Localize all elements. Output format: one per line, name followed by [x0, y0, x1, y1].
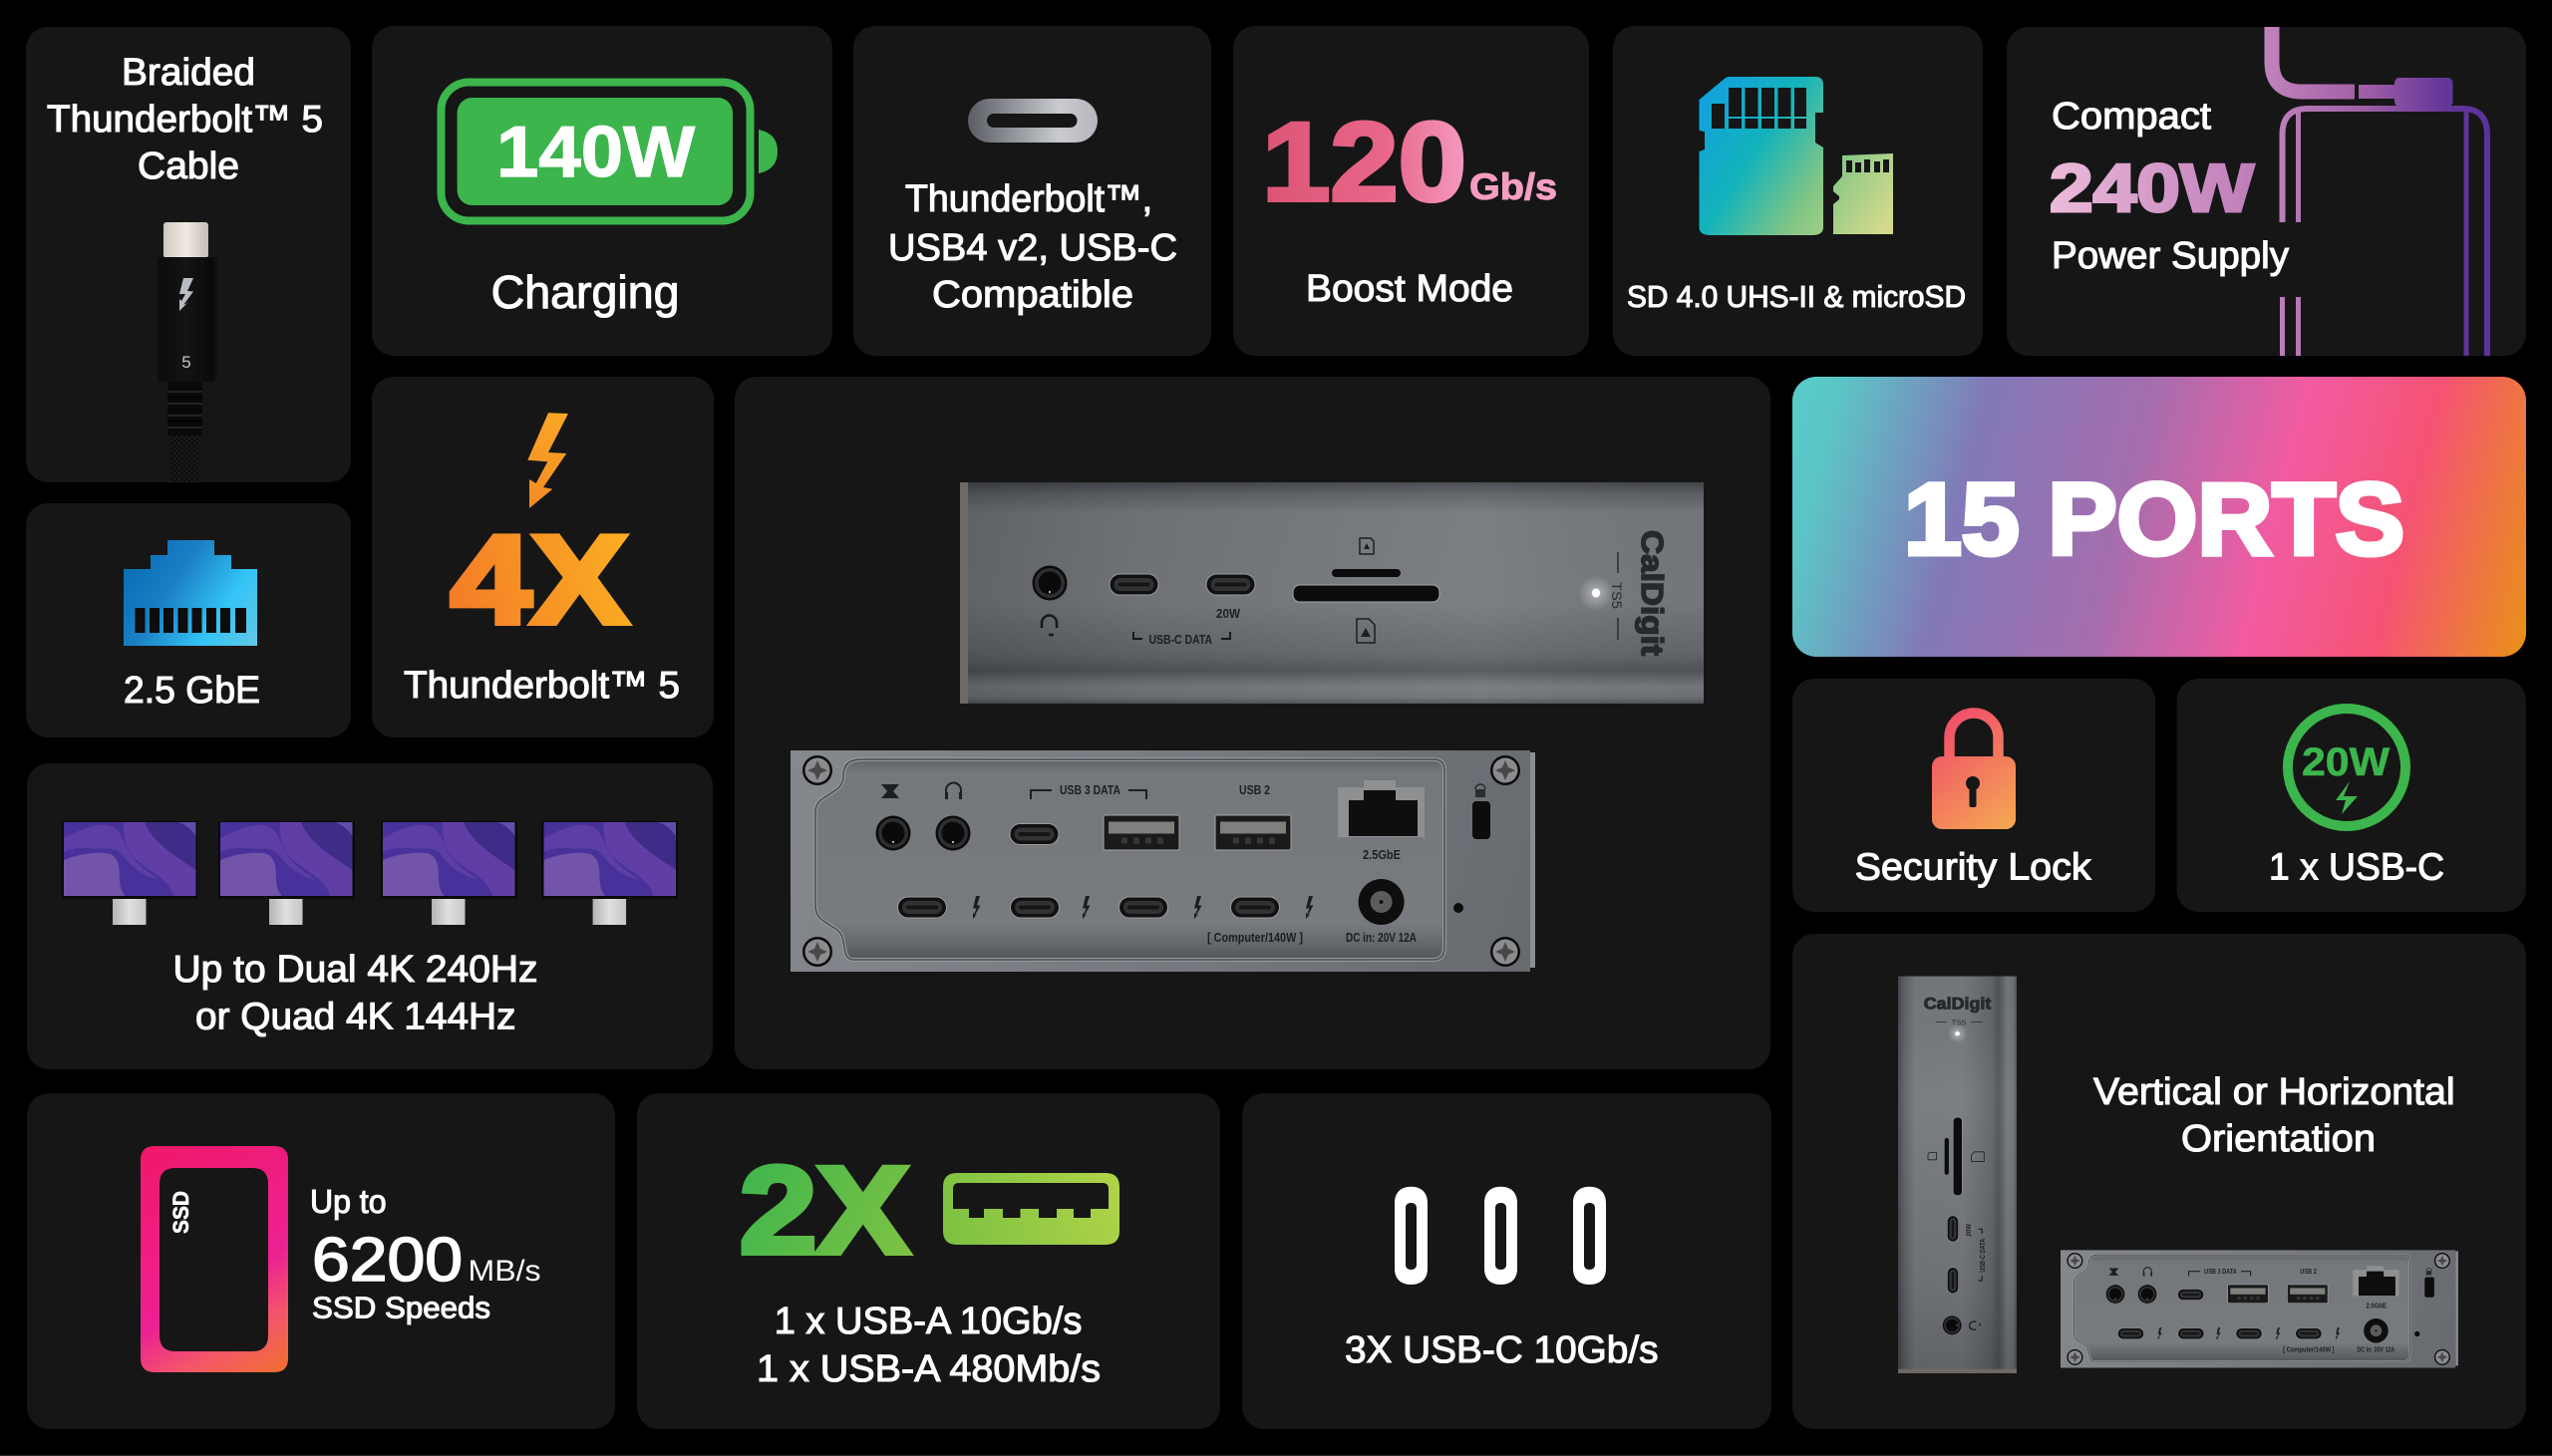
banner: 15 ports [1792, 377, 2526, 657]
illustration: dock vertical [1898, 977, 2017, 1373]
label: SSD speed: 6200 [312, 1226, 463, 1295]
panel: 2.5 GbE [26, 503, 351, 737]
panel: 4X Thunderbolt 5 [372, 377, 714, 737]
panel: 3X USB-C [1242, 1093, 1771, 1429]
illustration: dock front: 20W [1216, 606, 1241, 621]
icon: battery [441, 82, 778, 221]
label: SSD speed: MB/s [469, 1255, 540, 1288]
label: compatibility: USB4 v2, USB-C [888, 227, 1177, 269]
illustration: dock front: TS5 [1609, 582, 1625, 609]
panel: braided Thunderbolt 5 cable [26, 27, 351, 482]
illustration: dock back: 2.5GbE [1363, 847, 1401, 862]
icon: SSD drive: SSD [168, 1191, 193, 1234]
label: SSD speed: Up to [310, 1183, 387, 1220]
panel: display support [27, 763, 713, 1069]
label: 1 x USB-C: 1 x USB-C [2269, 847, 2444, 889]
panel: orientation [1792, 934, 2526, 1429]
figure: 120 Gb/s [1262, 100, 1557, 224]
illustration: dock back small: DC in: 20V 12A [2357, 1347, 2394, 1354]
illustration: dock vertical: 20W [1966, 1223, 1973, 1237]
panel: security lock [1792, 679, 2155, 912]
figure: 120 Gb/s: 120 [1262, 100, 1466, 224]
panel: compact 240W power supply [2007, 27, 2526, 356]
illustration: dock back small: USB 2 [2300, 1269, 2317, 1276]
panel: 2X USB-A [637, 1093, 1220, 1429]
illustration: dock back: USB 3 DATA [1060, 782, 1120, 797]
label: orientation: Vertical or Horizontal [2093, 1071, 2455, 1113]
heading: braided cable [47, 52, 323, 187]
illustration: dock back: DC in: 20V 12A [1346, 930, 1417, 945]
illustration: dock vertical: CalDigit [1924, 995, 1992, 1014]
label: USB-A speeds: 1 x USB-A 480Mb/s [757, 1348, 1101, 1390]
label: power supply: Power Supply [2052, 235, 2289, 277]
figure: 120 Gb/s: Gb/s [1469, 166, 1557, 207]
panel: SD and microSD [1613, 26, 1983, 356]
figure: 240W: 240W [2050, 150, 2255, 226]
label: boost mode: Boost Mode [1306, 268, 1513, 310]
label: display modes: Up to Dual 4K 240Hz [173, 949, 538, 991]
heading: braided cable: Thunderbolt™ 5 [47, 99, 323, 141]
label: orientation: Orientation [2181, 1118, 2376, 1160]
label: compatibility [888, 178, 1177, 316]
icon: padlock [1932, 714, 2016, 829]
heading: braided cable: Braided [122, 52, 255, 94]
icon: Thunderbolt cable connector: 5 [181, 353, 191, 372]
label: USB-A speeds [757, 1301, 1101, 1390]
illustration: dock front [960, 482, 1704, 704]
label: compatibility: Compatible [932, 274, 1133, 316]
illustration: dock vertical: USB-C DATA [1980, 1239, 1987, 1273]
illustration: dock back: USB 2 [1239, 782, 1270, 797]
icon: 20W charging ring: 20W [2302, 740, 2390, 784]
illustration: dock back small: 2.5GbE [2367, 1303, 2387, 1310]
icon: USB-A port [943, 1173, 1119, 1245]
label: 2.5 GbE: 2.5 GbE [124, 670, 260, 712]
illustration: dock front: USB-C DATA [1148, 632, 1212, 647]
figure: 2X: 2X [740, 1142, 909, 1280]
icon: 20W charging ring [2288, 709, 2405, 826]
illustration: power supply and cable [2272, 27, 2487, 356]
panel: 120 Gb/s boost mode [1233, 26, 1589, 356]
illustration: dock back small: [ Computer/140W ] [2283, 1347, 2334, 1354]
icon: orange lightning bolt [527, 413, 568, 508]
label: Thunderbolt 5: Thunderbolt™ 5 [404, 665, 680, 707]
icon: battery: 140W [496, 113, 695, 192]
label: SSD speed [310, 1183, 540, 1325]
figure: 4X: 4X [451, 509, 628, 650]
panel: SSD speeds [27, 1093, 615, 1429]
label: compact: Compact [2052, 96, 2211, 138]
label: charging: Charging [491, 266, 680, 318]
panel: dock front and back [735, 377, 1770, 1069]
panel: Thunderbolt USB4 compatibility [853, 26, 1211, 356]
banner: 15 ports: 15 PORTS [1904, 462, 2404, 576]
heading: braided cable: Cable [138, 146, 239, 187]
label: 3X USB-C: 3X USB-C 10Gb/s [1345, 1329, 1659, 1371]
icon: three USB-C ports [1395, 1187, 1606, 1285]
label: USB-A speeds: 1 x USB-A 10Gb/s [775, 1301, 1082, 1342]
illustration: dock back: [ Computer/140W ] [1207, 930, 1303, 945]
label: orientation [2093, 1071, 2455, 1160]
illustration: dock vertical: TS5 [1952, 1019, 1966, 1027]
panel: 20W USB-C [2177, 679, 2526, 912]
illustration: dock front: CalDigit [1635, 530, 1670, 656]
label: display modes: or Quad 4K 144Hz [195, 997, 516, 1038]
icon: four monitors [62, 821, 678, 925]
icon: ethernet port [124, 540, 257, 646]
icon: Thunderbolt cable connector [154, 222, 218, 482]
icon: SSD drive [141, 1146, 288, 1372]
label: SD cards: SD 4.0 UHS-II & microSD [1627, 279, 1966, 314]
illustration: dock back small [2061, 1250, 2458, 1368]
label: compatibility: Thunderbolt™, [905, 178, 1152, 220]
label: security lock: Security Lock [1855, 847, 2092, 889]
icon: USB-C port [968, 99, 1098, 143]
icon: SD cards [1699, 77, 1893, 235]
panel: 140W charging [372, 26, 832, 356]
label: SSD speed: SSD Speeds [312, 1291, 490, 1325]
label: display modes [173, 949, 538, 1038]
illustration: dock back small: USB 3 DATA [2204, 1269, 2237, 1276]
illustration: dock back [791, 750, 1535, 972]
